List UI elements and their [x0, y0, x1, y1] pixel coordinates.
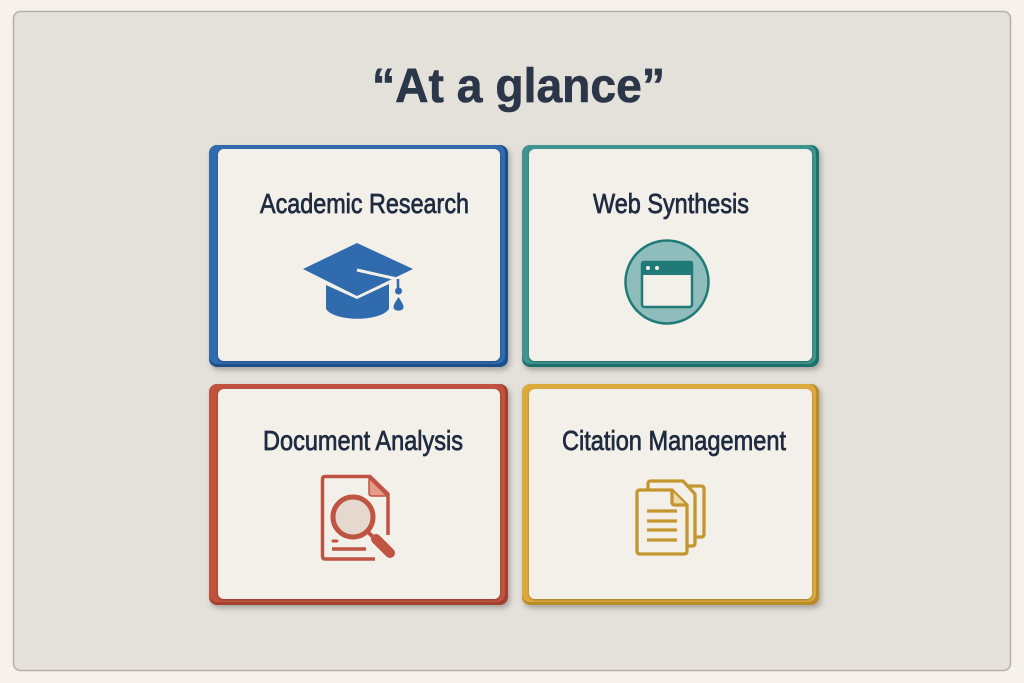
- panel: Academic Research: [209, 145, 508, 367]
- heading: Academic Research: Academic Research: [260, 188, 469, 219]
- title: “At a glance”: [372, 60, 665, 113]
- panel: Web Synthesis: [522, 145, 819, 367]
- panel: Document Analysis: [209, 384, 508, 605]
- heading: Web Synthesis: Web Synthesis: [593, 188, 749, 219]
- icon: graduation cap: [303, 243, 413, 319]
- icon: browser window: [626, 240, 708, 324]
- panel: Citation Management: [522, 384, 819, 605]
- icon: stacked documents: [637, 481, 704, 554]
- heading: Document Analysis: Document Analysis: [263, 425, 463, 456]
- heading: Citation Management: Citation Management: [562, 425, 786, 456]
- icon: document with magnifying glass: [322, 476, 390, 559]
